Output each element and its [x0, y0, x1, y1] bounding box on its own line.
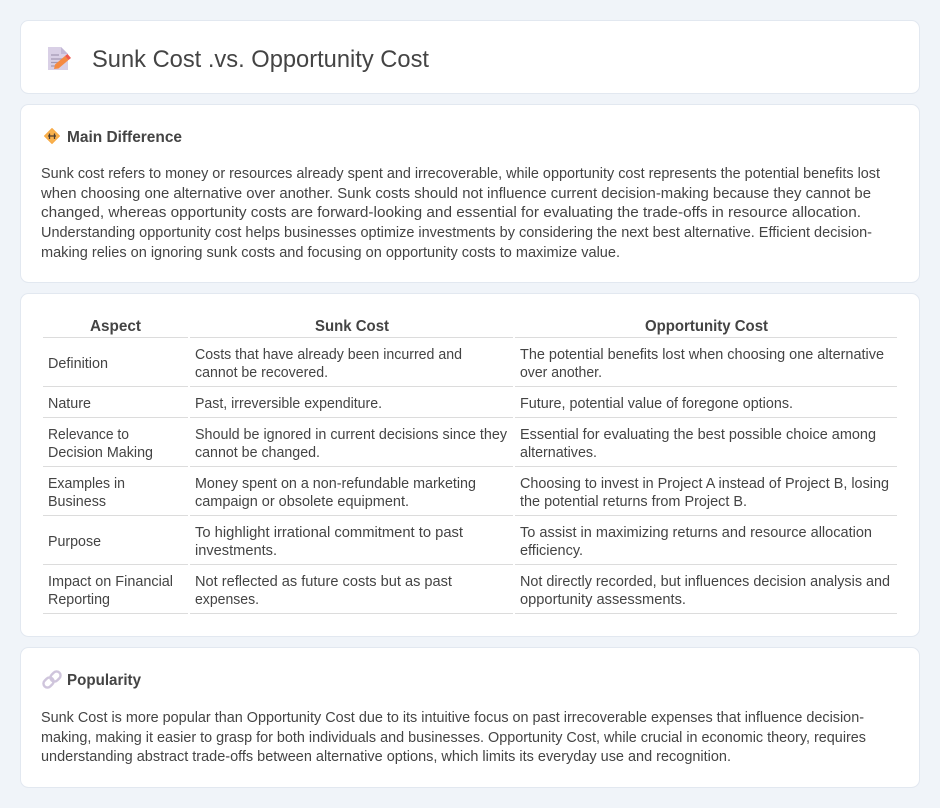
table row: examples in business — [48, 476, 889, 510]
heading: main difference: Main Difference — [67, 129, 182, 146]
table row: nature: Past, irreversible expenditure. — [195, 396, 382, 412]
icon: chain link — [42, 670, 62, 689]
table row: nature: Future, potential value of foregone options. — [520, 396, 793, 412]
text block: popularity paragraph: Sunk Cost is more popular than Opportunity Cost due to its intuitive focus on past irrecoverable expenses that influence decision- — [41, 710, 864, 726]
table row: definition: cannot be recovered. — [195, 365, 328, 381]
table row: examples in business: Examples in — [48, 476, 125, 492]
table row: relevance to decision making: alternatives. — [520, 445, 597, 461]
table row: examples in business: campaign or obsolete equipment. — [195, 494, 409, 510]
table row: impact on financial reporting: Impact on Financial — [48, 574, 173, 590]
panel: main difference — [20, 104, 920, 282]
table header row: Aspect — [90, 318, 142, 335]
text block: main difference paragraph: changed, whereas opportunity costs are forward-looking and essential for evaluating the trade-offs in resource allocation. — [41, 205, 861, 221]
text block: main difference paragraph — [40, 166, 880, 261]
table row: definition: Costs that have already been incurred and — [195, 347, 462, 363]
table row: impact on financial reporting: Not directly recorded, but influences decision analysis and — [520, 574, 890, 590]
table row: impact on financial reporting: Reporting — [48, 592, 110, 608]
table row: examples in business: the potential returns from Project B. — [520, 494, 747, 510]
table row: examples in business: Business — [48, 494, 106, 510]
table row: examples in business: Money spent on a non-refundable marketing — [195, 476, 476, 492]
table header row — [90, 318, 769, 335]
table row: purpose — [48, 525, 872, 559]
table row: impact on financial reporting: Not reflected as future costs but as past — [195, 574, 452, 590]
table row: definition: over another. — [520, 365, 602, 381]
title: Sunk Cost .vs. Opportunity Cost — [92, 46, 429, 73]
table row: purpose: To assist in maximizing returns and resource allocation — [520, 525, 872, 541]
table row: impact on financial reporting: opportunity assessments. — [520, 592, 686, 608]
table row: nature — [48, 396, 793, 412]
text block: main difference paragraph: making relies on ignoring sunk costs and focusing on opportunity costs to maximize value. — [41, 245, 620, 261]
table row: nature: Nature — [48, 396, 91, 412]
table row: definition — [48, 347, 884, 381]
table row: purpose: To highlight irrational commitment to past — [195, 525, 463, 541]
panel: title header — [20, 20, 920, 94]
table row: purpose: Purpose — [48, 534, 101, 550]
table header row: Opportunity Cost — [645, 318, 769, 335]
text block: popularity paragraph: understanding abstract trade-offs between alternative options, which limits its everyday use and recognition. — [41, 749, 731, 765]
table row: purpose: investments. — [195, 543, 277, 559]
icon: document with pencil — [48, 47, 71, 70]
text block: popularity paragraph — [41, 710, 866, 765]
panel: comparison table — [20, 294, 920, 636]
text block: main difference paragraph: Sunk cost refers to money or resources already spent and irrecoverable, while opportunity cost represents the potential benefits lost — [41, 166, 880, 182]
icon: orange diamond sign — [44, 128, 60, 144]
table row: examples in business: Choosing to invest in Project A instead of Project B, losing — [520, 476, 889, 492]
table row: relevance to decision making: cannot be changed. — [195, 445, 320, 461]
text block: popularity paragraph: making, making it easier to grasp for both individuals and businesses. Opportunity Cost, while crucial in economic theory, requires — [41, 730, 866, 746]
table row: definition: Definition — [48, 356, 108, 372]
table row: impact on financial reporting — [48, 574, 890, 608]
table row: purpose: efficiency. — [520, 543, 583, 559]
panel: popularity — [20, 648, 920, 788]
table row: relevance to decision making: Essential for evaluating the best possible choice among — [520, 427, 876, 443]
table row: impact on financial reporting: expenses. — [195, 592, 259, 608]
table header row: Sunk Cost — [315, 318, 390, 335]
text block: main difference paragraph: when choosing one alternative over another. Sunk costs should not influence current decision-making because they cannot be — [40, 186, 871, 202]
table row: definition: The potential benefits lost when choosing one alternative — [520, 347, 884, 363]
table row: relevance to decision making: Should be ignored in current decisions since they — [195, 427, 508, 443]
heading: popularity: Popularity — [67, 672, 141, 689]
table row: relevance to decision making: Relevance to — [48, 427, 129, 443]
text block: main difference paragraph: Understanding opportunity cost helps businesses optimize investments by considering the next best alternative. Efficient decision- — [41, 225, 872, 241]
table row: relevance to decision making — [48, 427, 876, 461]
table row: relevance to decision making: Decision Making — [48, 445, 153, 461]
